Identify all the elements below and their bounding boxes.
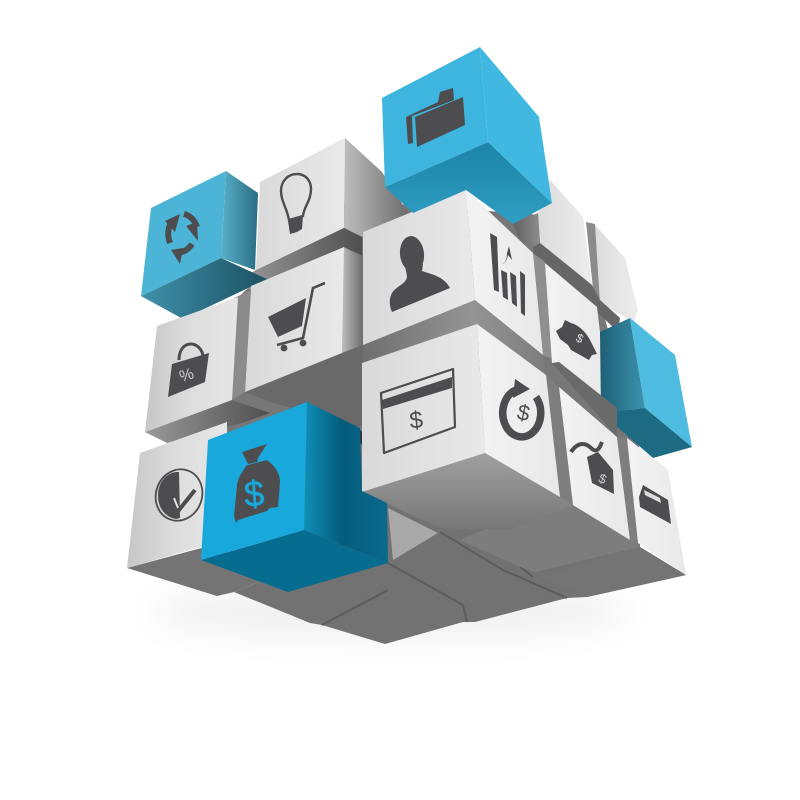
front face <box>127 422 228 568</box>
side face <box>304 402 388 563</box>
front face <box>363 190 475 345</box>
side face <box>344 138 408 237</box>
panel: underside blocks <box>234 480 686 644</box>
cube: shopping cart <box>245 247 363 427</box>
ground shadow <box>150 586 630 638</box>
cube: credit card <box>362 324 573 530</box>
right face <box>466 190 543 355</box>
front face <box>256 138 345 270</box>
under face <box>385 142 552 224</box>
icon: money bag <box>234 444 280 523</box>
cube: drawer <box>617 437 686 575</box>
side face <box>342 247 363 353</box>
icon: money bag: $ <box>243 472 266 515</box>
icon: piggy bank <box>556 320 597 360</box>
under strip <box>363 300 546 375</box>
outer face <box>630 318 692 447</box>
under face <box>245 345 363 427</box>
front face <box>141 171 226 296</box>
side face <box>480 47 552 203</box>
under face <box>362 453 573 530</box>
front face <box>145 297 238 432</box>
cube: money bag blue <box>201 402 388 592</box>
icon: person silhouette <box>390 235 450 312</box>
under face <box>141 258 267 319</box>
icon: lock with percent <box>168 344 209 397</box>
icon: credit card: $ <box>408 406 424 435</box>
front face <box>382 47 488 187</box>
cube: person and chart <box>363 190 555 375</box>
cube: upper far right <box>533 225 638 332</box>
cube: checkmark <box>127 422 290 596</box>
icon: piggy bank: $ <box>574 331 586 346</box>
cube: folder blue <box>382 47 552 224</box>
side gap <box>232 290 251 400</box>
cube: lightbulb <box>240 138 408 290</box>
cube: piggy bank <box>545 263 609 407</box>
icon: drawer tray <box>639 485 671 524</box>
icon: price tag <box>571 442 614 494</box>
side face <box>221 171 258 270</box>
cube: price tag <box>546 362 630 540</box>
under face <box>601 408 692 458</box>
under face <box>127 547 290 596</box>
cube: blue right <box>600 318 692 458</box>
icon: recycle arrows <box>165 214 198 264</box>
cube: recycle blue <box>141 171 267 319</box>
icon: circular dollar arrow <box>503 379 541 437</box>
under face <box>201 530 388 592</box>
icon: check circle <box>148 463 210 527</box>
icon: folder <box>406 88 465 147</box>
cube: upper back right <box>513 180 606 304</box>
front face <box>362 324 485 492</box>
under face <box>240 228 362 290</box>
dark top corner <box>350 425 362 445</box>
cube: percent lock <box>145 290 270 443</box>
right face <box>477 324 560 497</box>
central dark core behind cubes <box>215 200 640 600</box>
under face <box>145 400 270 443</box>
inner side <box>600 318 645 413</box>
icon: lock with percent: % <box>178 366 196 386</box>
front face <box>201 402 307 560</box>
icon: bar chart <box>490 233 525 316</box>
icon: shopping cart <box>268 283 325 351</box>
front face <box>245 247 344 392</box>
icon: price tag: $ <box>597 470 609 487</box>
icon: circular dollar arrow: $ <box>515 399 532 426</box>
icon: lightbulb <box>281 174 311 234</box>
icon: credit card <box>381 369 455 453</box>
